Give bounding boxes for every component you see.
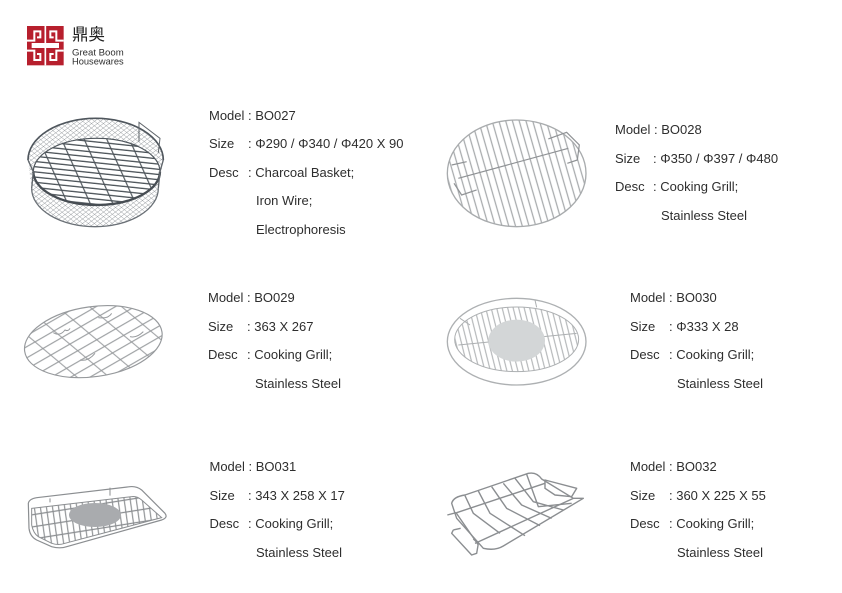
specs: BO030	[630, 290, 763, 391]
specs: BO032: Stainless Steel	[677, 545, 763, 560]
specs: BO030: Model : BO030	[630, 290, 717, 305]
specs: BO031: Desc	[210, 516, 240, 531]
specs: BO028	[615, 122, 778, 223]
product image: BO029 oval cooking grill	[20, 297, 167, 386]
specs: BO029: Stainless Steel	[255, 376, 341, 391]
specs: BO030: Stainless Steel	[677, 376, 763, 391]
specs: BO027: Desc	[209, 165, 239, 180]
logo Chinese name: 鼎奥	[72, 25, 105, 44]
specs: BO027: Electrophoresis	[256, 222, 346, 237]
specs: BO032: Desc	[630, 516, 660, 531]
logo English name line 2: Housewares	[72, 56, 124, 66]
specs: BO027	[209, 108, 403, 237]
specs: BO031: : Cooking Grill;	[248, 516, 333, 531]
specs: BO029: : 363 X 267	[247, 319, 314, 334]
specs: BO027: : Charcoal Basket;	[248, 165, 354, 180]
specs: BO028: Model : BO028	[615, 122, 702, 137]
specs: BO032: : Cooking Grill;	[669, 516, 754, 531]
product image: BO028 cooking grill	[447, 120, 586, 227]
specs: BO029: Desc	[208, 347, 238, 362]
specs: BO030: Size	[630, 319, 655, 334]
specs: BO028: : Cooking Grill;	[653, 179, 738, 194]
specs: BO031: Size	[210, 488, 235, 503]
specs: BO030: Desc	[630, 347, 660, 362]
specs: BO029: Size	[208, 319, 233, 334]
specs: BO032: : 360 X 225 X 55	[669, 488, 766, 503]
specs: BO028: : Φ350 / Φ397 / Φ480	[653, 151, 778, 166]
specs: BO031: Model : BO031	[210, 459, 296, 474]
specs: BO031: : 343 X 258 X 17	[248, 488, 345, 503]
product image: BO027 charcoal basket	[28, 118, 163, 227]
specs: BO028: Size	[615, 151, 640, 166]
specs: BO032: Size	[630, 488, 655, 503]
specs: BO027: : Φ290 / Φ340 / Φ420 X 90	[248, 136, 403, 151]
specs: BO027: Iron Wire;	[256, 193, 312, 208]
specs: BO029: Model : BO029	[208, 290, 295, 305]
specs: BO031	[210, 459, 345, 560]
product image: BO032 roasting rack	[447, 473, 583, 555]
specs: BO028: Desc	[615, 179, 645, 194]
icon: red knot emblem	[27, 26, 64, 65]
logo: Great Boom Housewares	[27, 25, 124, 66]
product image: BO031 rectangular grill with disc	[28, 487, 166, 548]
product image: BO030 round grill with disc	[447, 298, 586, 385]
specs: BO030: : Φ333 X 28	[669, 319, 739, 334]
specs: BO030: : Cooking Grill;	[669, 347, 754, 362]
specs: BO027: Model : BO027	[209, 108, 296, 123]
specs: BO029	[208, 290, 341, 391]
specs: BO031: Stainless Steel	[256, 545, 342, 560]
specs: BO028: Stainless Steel	[661, 208, 747, 223]
specs: BO027: Size	[209, 136, 234, 151]
specs: BO029: : Cooking Grill;	[247, 347, 332, 362]
logo English name line 1: Great Boom	[72, 48, 124, 58]
specs: BO032	[630, 459, 766, 560]
specs: BO032: Model : BO032	[630, 459, 717, 474]
